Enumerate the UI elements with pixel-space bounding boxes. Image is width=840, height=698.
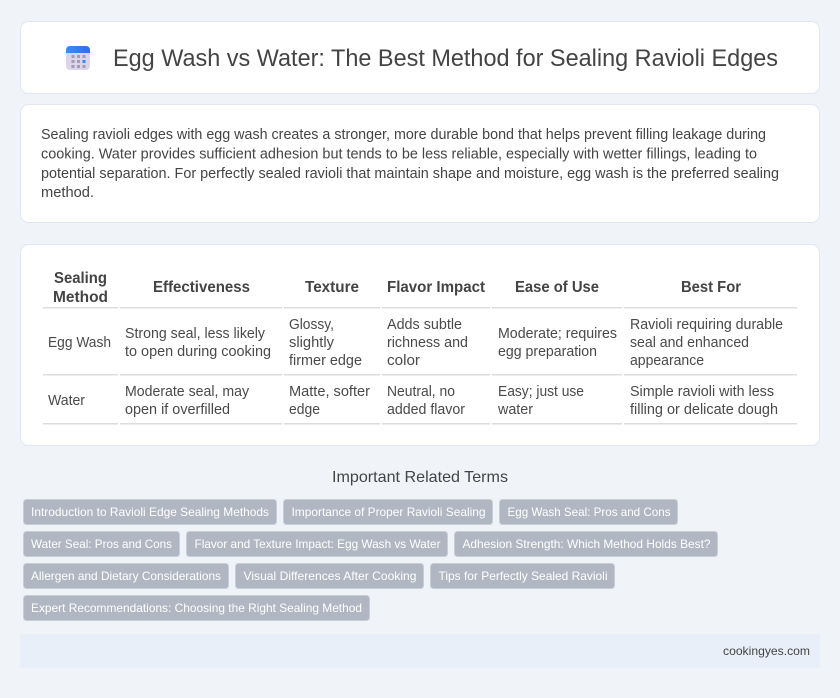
table row: egg wash: to open during cooking xyxy=(125,344,271,360)
table row: water: Easy; just use xyxy=(498,384,584,400)
table row: water xyxy=(48,384,778,418)
tag: Tips for Perfectly Sealed Ravioli xyxy=(438,569,608,583)
footer source text: cookingyes.com xyxy=(723,644,810,658)
table header row xyxy=(53,270,741,306)
table row: water: added flavor xyxy=(387,402,465,418)
table header row: Sealing xyxy=(54,270,107,287)
title: Egg Wash vs Water: The Best Method for Sealing Ravioli Edges xyxy=(113,45,778,72)
table row: egg wash: firmer edge xyxy=(289,353,362,369)
table row: egg wash: seal and enhanced xyxy=(630,335,749,351)
table row: egg wash: Ravioli requiring durable xyxy=(630,317,783,333)
tag xyxy=(500,500,678,524)
table row: egg wash: appearance xyxy=(630,353,704,369)
tag: Allergen and Dietary Considerations xyxy=(31,569,221,583)
tag: Introduction to Ravioli Edge Sealing Methods xyxy=(31,505,269,519)
table row: water: edge xyxy=(289,402,320,418)
table row: egg wash: egg preparation xyxy=(498,344,597,360)
tag: Water Seal: Pros and Cons xyxy=(31,537,172,551)
table header row: Best For xyxy=(681,279,741,296)
tag xyxy=(454,532,718,556)
table header row: Effectiveness xyxy=(153,279,250,296)
tag xyxy=(430,564,614,588)
table row: egg wash xyxy=(48,317,783,369)
table row: egg wash: Adds subtle xyxy=(387,317,462,333)
intro paragraph: Sealing ravioli edges with egg wash creates a stronger, more durable bond that helps prevent filling leakage during xyxy=(41,127,766,143)
panel: comparison table xyxy=(20,244,820,446)
tag: Expert Recommendations: Choosing the Right Sealing Method xyxy=(31,601,362,615)
table row: water: Water xyxy=(48,393,85,409)
tag xyxy=(236,564,424,588)
tag xyxy=(24,500,276,524)
tag: Flavor and Texture Impact: Egg Wash vs Water xyxy=(194,537,440,551)
table row: water: Neutral, no xyxy=(387,384,455,400)
table header row: Texture xyxy=(305,279,359,296)
table header row: Ease of Use xyxy=(515,279,599,296)
panel: header xyxy=(20,22,820,94)
table row: water: filling or delicate dough xyxy=(630,402,778,418)
icon: calendar xyxy=(66,46,90,70)
intro paragraph: cooking. Water provides sufficient adhesion but tends to be less reliable, especially with wetter fillings, leading to xyxy=(41,146,757,162)
intro paragraph: method. xyxy=(41,185,94,201)
tag xyxy=(24,532,180,556)
tag: Visual Differences After Cooking xyxy=(244,569,416,583)
table row: egg wash: color xyxy=(387,353,420,369)
table row: water: Moderate seal, may xyxy=(125,384,250,400)
table row: egg wash: Glossy, xyxy=(289,317,334,333)
table row: water: water xyxy=(497,402,533,418)
panel: introduction xyxy=(20,104,820,222)
tag: Egg Wash Seal: Pros and Cons xyxy=(508,505,670,519)
table header row: Method xyxy=(53,289,108,306)
heading: related terms: Important Related Terms xyxy=(332,469,508,486)
table row: egg wash: slightly xyxy=(289,335,335,351)
intro paragraph xyxy=(41,127,779,201)
tag: Adhesion Strength: Which Method Holds Best? xyxy=(462,537,711,551)
tag: Importance of Proper Ravioli Sealing xyxy=(292,505,486,519)
tag xyxy=(284,500,492,524)
table row: water: open if overfilled xyxy=(125,402,230,418)
table row: egg wash: Egg Wash xyxy=(48,335,111,351)
table header row: Flavor Impact xyxy=(387,279,486,296)
related terms tag list xyxy=(24,500,718,620)
footer bar xyxy=(20,634,820,668)
tag xyxy=(24,564,228,588)
table row: egg wash: Strong seal, less likely xyxy=(125,326,266,342)
tag xyxy=(186,532,448,556)
tag xyxy=(24,596,370,620)
table row: water: Matte, softer xyxy=(289,384,370,400)
intro paragraph: potential separation. For perfectly sealed ravioli that maintain shape and moisture, egg wash is the preferred sealing xyxy=(41,166,779,182)
table row: egg wash: richness and xyxy=(387,335,468,351)
table row: egg wash: Moderate; requires xyxy=(498,326,617,342)
table row: water: Simple ravioli with less xyxy=(630,384,774,400)
